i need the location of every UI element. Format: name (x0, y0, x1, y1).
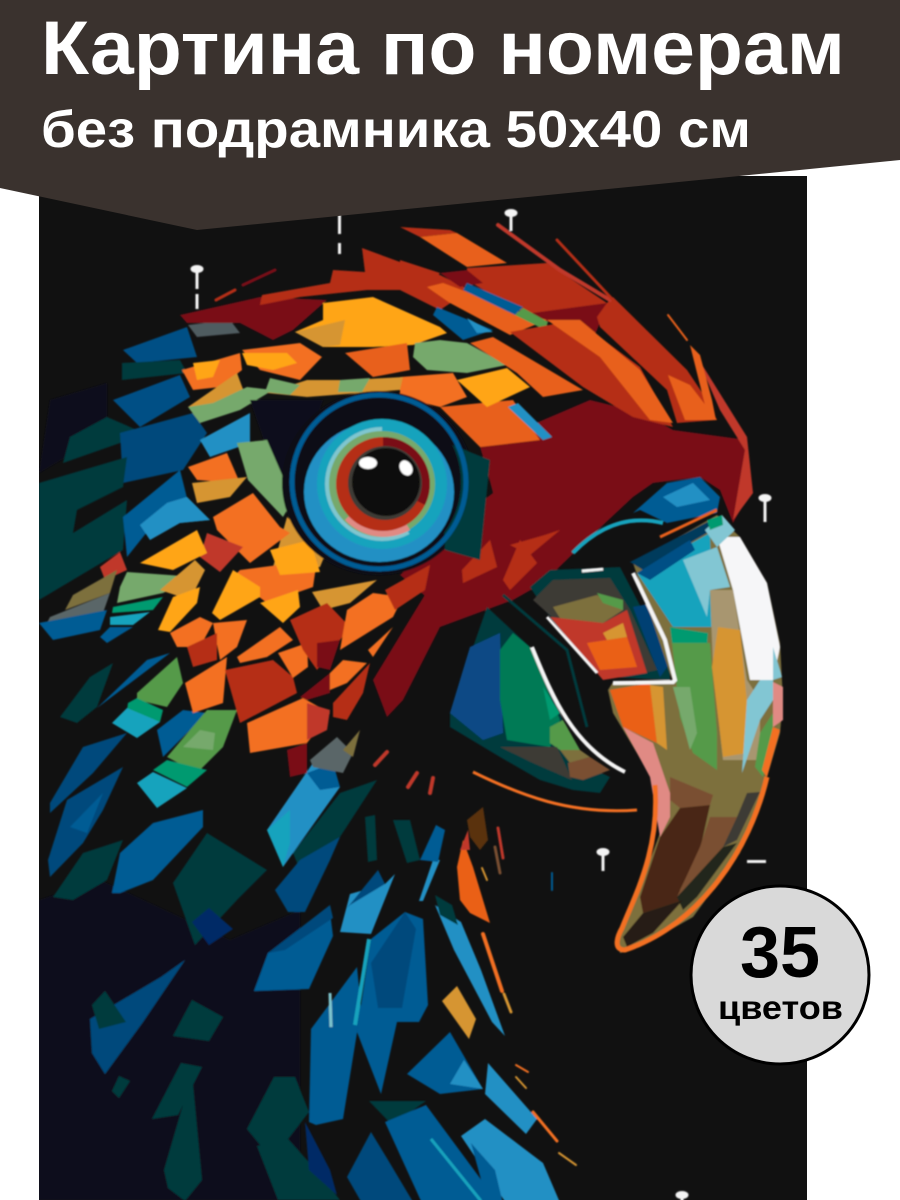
wing and body feathers (39, 320, 576, 1200)
head plumage (140, 225, 753, 777)
banner: dark title ribbon (0, 0, 900, 230)
cheek patch (450, 595, 637, 811)
brow above beak (573, 477, 723, 553)
illustration: parrot painting (39, 209, 783, 1200)
paint number pins (190, 209, 772, 1200)
lower beak (530, 567, 670, 680)
panel: painting canvas (39, 176, 807, 1200)
eye (282, 391, 490, 575)
title: Картина по номерам (41, 6, 845, 91)
upper beak (608, 515, 783, 953)
badge: 35 colours: 35 (740, 913, 820, 993)
badge: 35 colours (691, 886, 869, 1064)
subtitle: без подрамника 50х40 см (41, 101, 751, 159)
badge: 35 colours: цветов (718, 989, 843, 1026)
